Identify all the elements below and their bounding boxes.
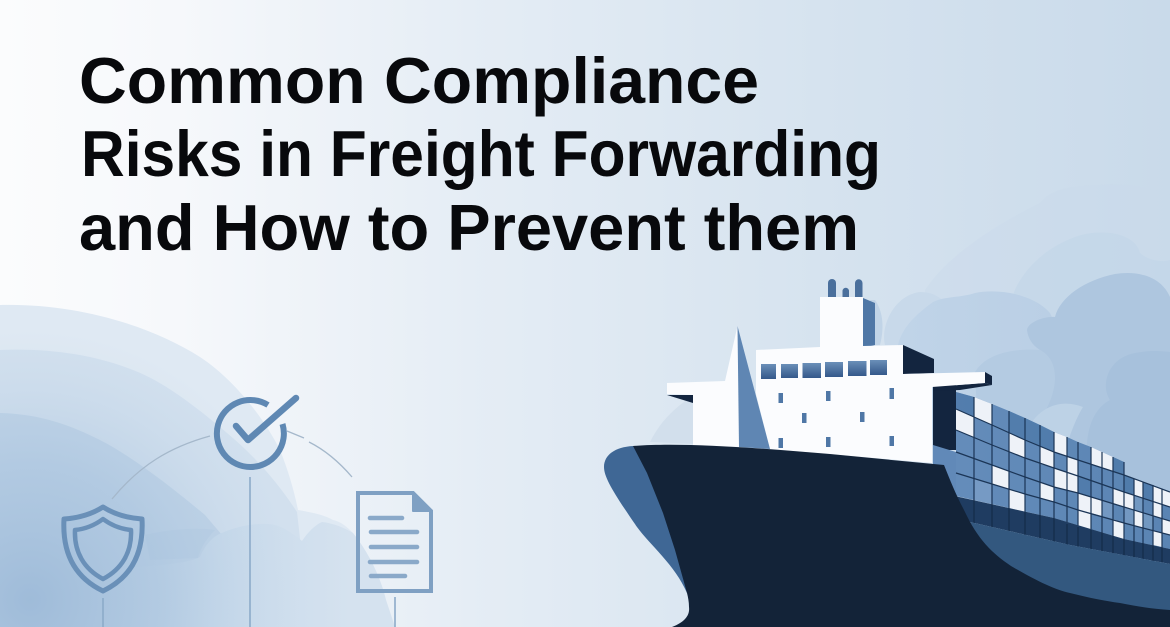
left wing and sail [667,326,740,447]
connector arcs and stems [103,431,395,627]
faint cloud behind bridge [650,388,720,445]
funnels [828,279,862,298]
lighter containers [974,478,1153,530]
big right cloud [1027,273,1170,560]
upper deck side [903,345,934,374]
inner shade [975,350,1100,470]
sail fin shade [738,326,770,449]
container stack [933,392,1170,564]
title line 1: Common Compliance [79,44,759,117]
left nested dome hills [0,305,395,627]
wall below block [933,445,956,500]
varied containers [956,392,1153,502]
dark waterline band [950,495,1170,564]
dark block under wing [933,385,956,450]
icon: document [358,493,431,591]
ship [604,279,1170,627]
superstructure block [756,345,985,463]
band dividers [974,500,1162,562]
pale patch [1030,404,1083,452]
dark cloud band [145,529,215,560]
clouds behind ship [650,184,1170,560]
bow blue side [604,446,700,600]
right wing end [985,372,992,385]
funnel block [820,297,875,352]
portholes [778,388,894,448]
lower right cloud [1086,351,1170,560]
pale bottom cloud [110,522,395,627]
title [79,44,881,264]
faint high clouds [925,184,1170,300]
container base [956,392,1170,549]
white containers [956,397,1170,547]
mid cloud [898,291,1110,440]
icon: shield [64,507,142,591]
bridge windows [761,360,887,379]
mid-blue lower hull [970,522,1170,627]
left wing shadow [667,395,693,403]
dark hull [633,445,1170,627]
title line 3: and How to Prevent them [79,191,859,264]
icon: checkmark in circle [217,398,296,467]
wing shadow [933,383,992,391]
container grid lines [956,397,1170,547]
title line 2: Risks in Freight Forwarding [81,117,881,190]
